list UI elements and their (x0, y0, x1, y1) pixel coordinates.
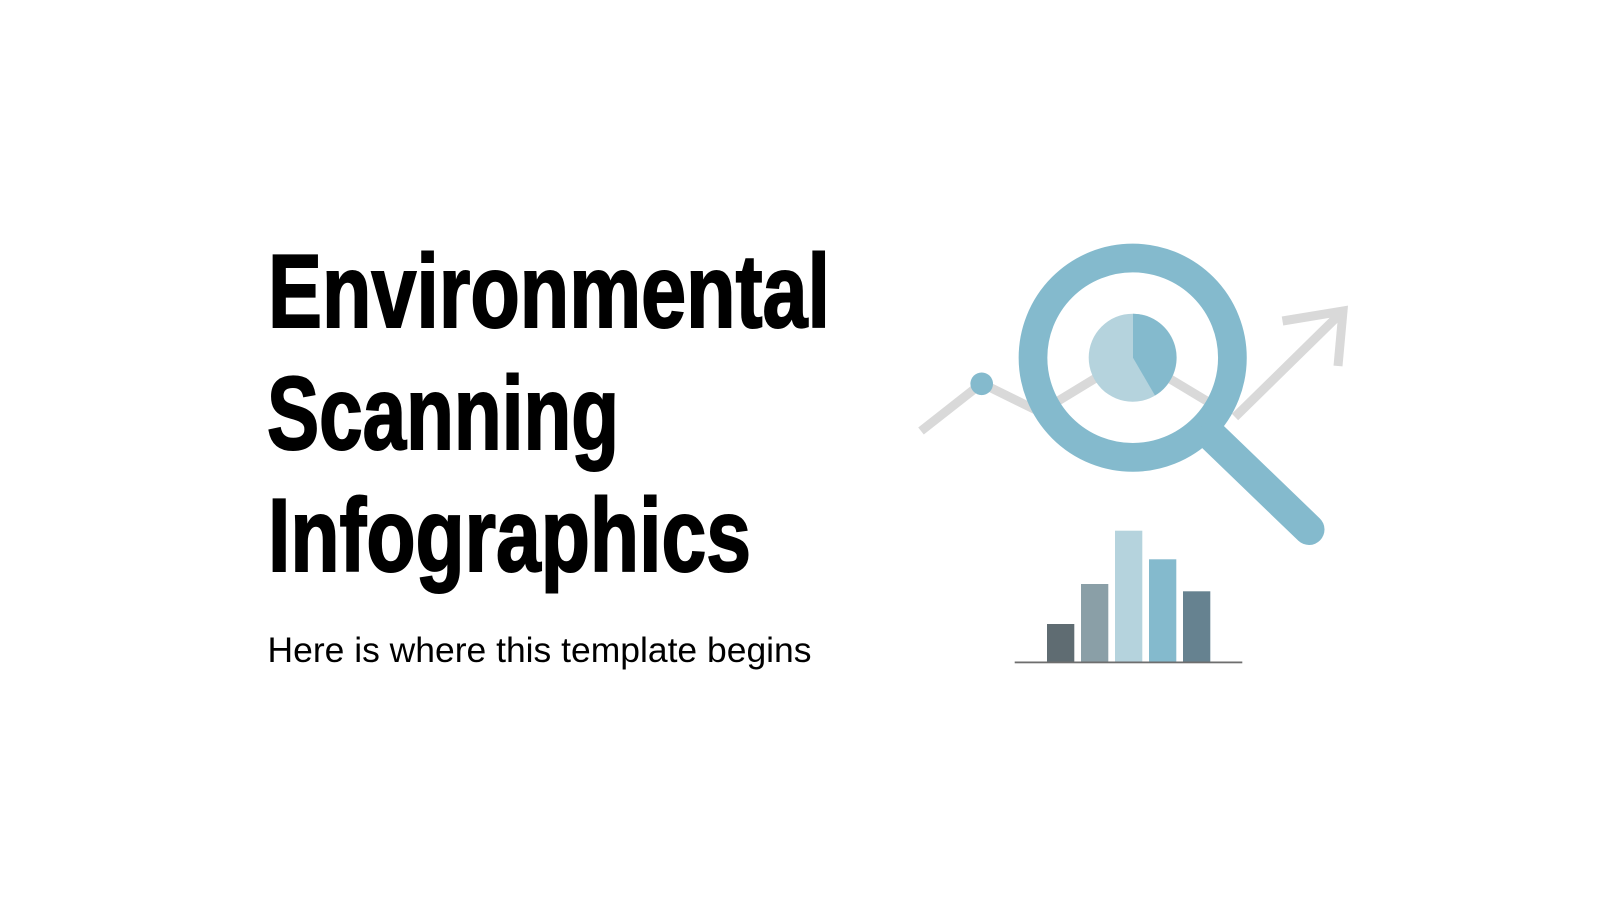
title: Scanning (267, 356, 619, 472)
title: Environmental (268, 234, 830, 350)
trend line (921, 356, 1230, 431)
subtitle: Here is where this template begins (268, 631, 812, 670)
data point (970, 372, 993, 395)
illustration: magnifier over trend line with bar chart (921, 258, 1343, 663)
trend arrow (1235, 311, 1343, 417)
pie chart (1089, 314, 1177, 402)
magnifying glass (1033, 258, 1309, 530)
bar chart (1015, 531, 1242, 663)
title (267, 234, 830, 594)
title: Infographics (268, 478, 751, 594)
